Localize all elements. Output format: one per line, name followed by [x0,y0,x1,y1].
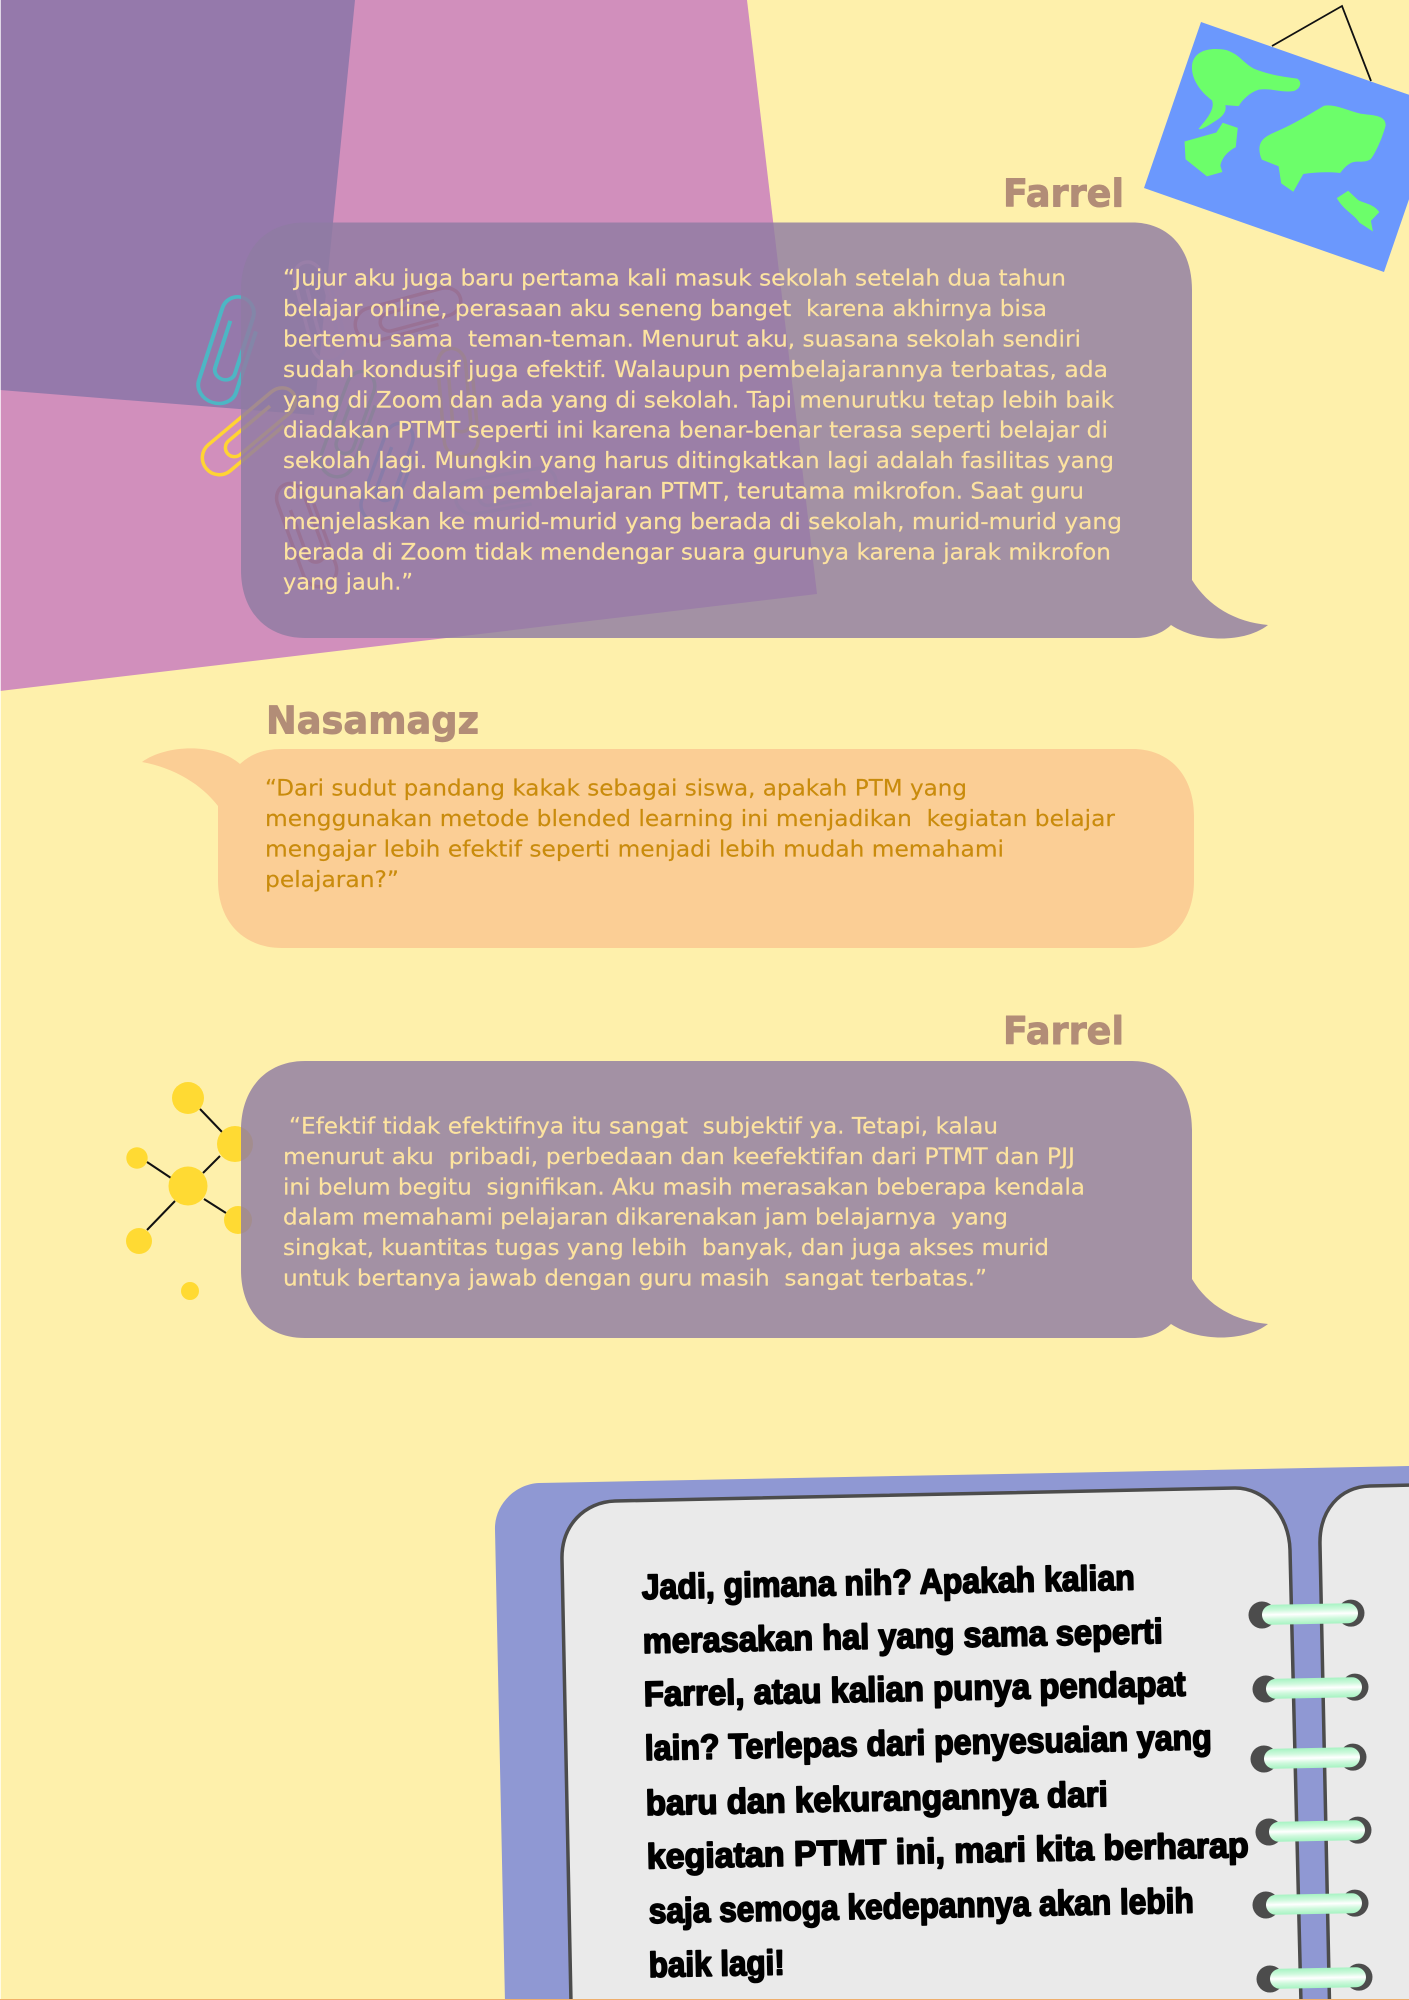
notebook cover [495,1466,1409,2000]
text block: Farrel answer 2: ini belum begitu signifikan. Aku masih merasakan beberapa kendala [283,1175,1085,1200]
icon: teal paperclip [194,293,265,408]
heading: Farrel 1: Farrel [1003,172,1124,216]
icon: yellow paperclip [195,382,305,482]
text block: Farrel answer 1: yang jauh.” [283,571,413,596]
text block: Farrel answer 1: belajar online, perasaan aku seneng banget karena akhirnya bisa [283,297,1047,322]
icon: red paperclip lower [272,478,341,592]
text block: closing message: saja semoga kedepannya akan lebih [648,1882,1194,1931]
icon: orange paperclip [436,347,480,458]
text block: Farrel answer 2: untuk bertanya jawab dengan guru masih sangat terbatas.” [283,1266,987,1292]
text block: Farrel answer 1: sudah kondusif juga efektif. Walaupun pembelajarannya terbatas, ada [283,358,1108,383]
text block: closing message: kegiatan PTMT ini, mari kita berharap [646,1826,1249,1876]
icon: pink paperclip [291,257,350,365]
text block: Farrel answer 2: singkat, kuantitas tugas yang lebih banyak, dan juga akses murid [283,1236,1049,1261]
text block: Nasamagz question: mengajar lebih efektif seperti menjadi lebih mudah memahami [265,838,1004,862]
text block: Farrel answer 2: dalam memahami pelajaran dikarenakan jam belajarnya yang [283,1206,1008,1231]
text block: Farrel answer 1: berada di Zoom tidak mendengar suara gurunya karena jarak mikrofon [283,540,1111,565]
text block: Farrel answer 1: “Jujur aku juga baru pertama kali masuk sekolah setelah dua tahun [283,267,1066,292]
panel: Nasamagz speech bubble [142,748,1194,948]
panel: Farrel speech bubble 2 [241,1061,1268,1338]
background shape: purple polygon [0,0,355,415]
text block: Nasamagz question: menggunakan metode blended learning ini menjadikan kegiatan belajar [265,807,1116,832]
text block: Nasamagz question: “Dari sudut pandang kakak sebagai siswa, apakah PTM yang [265,777,967,802]
text block: Nasamagz question: pelajaran?” [265,868,399,893]
text block: closing message: Jadi, gimana nih? Apakah kalian [641,1559,1135,1607]
notebook right page [1320,1485,1409,2000]
icon: red paperclip upper [351,284,466,345]
icon: hanging world map [1144,6,1409,272]
panel: spiral notebook [495,1466,1409,2000]
icon: blue paperclip [356,419,423,527]
text block: Farrel answer 1: bertemu sama teman-teman. Menurut aku, suasana sekolah sendiri [283,328,1081,352]
text block: Farrel answer 1: digunakan dalam pembelajaran PTMT, terutama mikrofon. Saat guru [283,480,1084,504]
text block: closing message: lain? Terlepas dari penyesuaian yang [644,1718,1212,1768]
text block: closing message: Farrel, atau kalian punya pendapat [643,1665,1186,1714]
background shape: pink polygon [0,0,817,691]
text block: closing message: baru dan kekurangannya dari [645,1775,1108,1823]
text block: Farrel answer 1: sekolah lagi. Mungkin yang harus ditingkatkan lagi adalah fasilitas yang [283,449,1114,474]
notebook left page [562,1488,1301,2000]
icon: green paperclip [316,368,385,482]
text block: closing message: merasakan hal yang sama seperti [642,1612,1163,1661]
heading: Nasamagz: Nasamagz [266,698,479,742]
panel: Farrel speech bubble 1 [241,222,1268,638]
text block: Nasamagz question [265,777,1116,893]
icon: molecule network [126,1082,253,1300]
text block: closing message [641,1559,1249,1985]
text block: closing message: baik lagi! [648,1943,785,1985]
icon: pale paperclip [453,466,559,517]
text block: Farrel answer 1: yang di Zoom dan ada yang di sekolah. Tapi menurutku tetap lebih baik [283,388,1114,413]
text block: Farrel answer 1: diadakan PTMT seperti ini karena benar-benar terasa seperti belajar di [283,419,1108,444]
paperclips cluster [194,257,559,592]
text block: Farrel answer 2: menurut aku pribadi, perbedaan dan keefektifan dari PTMT dan PJJ [283,1145,1075,1170]
text block: Farrel answer 1 [283,267,1122,596]
text block: Farrel answer 2 [283,1114,1085,1292]
text block: Farrel answer 2: “Efektif tidak efektifnya itu sangat subjektif ya. Tetapi, kalau [289,1114,998,1140]
heading: Farrel 2: Farrel [1003,1009,1124,1053]
spiral rings [1248,1599,1373,1993]
text block: Farrel answer 1: menjelaskan ke murid-murid yang berada di sekolah, murid-murid yang [283,510,1122,535]
